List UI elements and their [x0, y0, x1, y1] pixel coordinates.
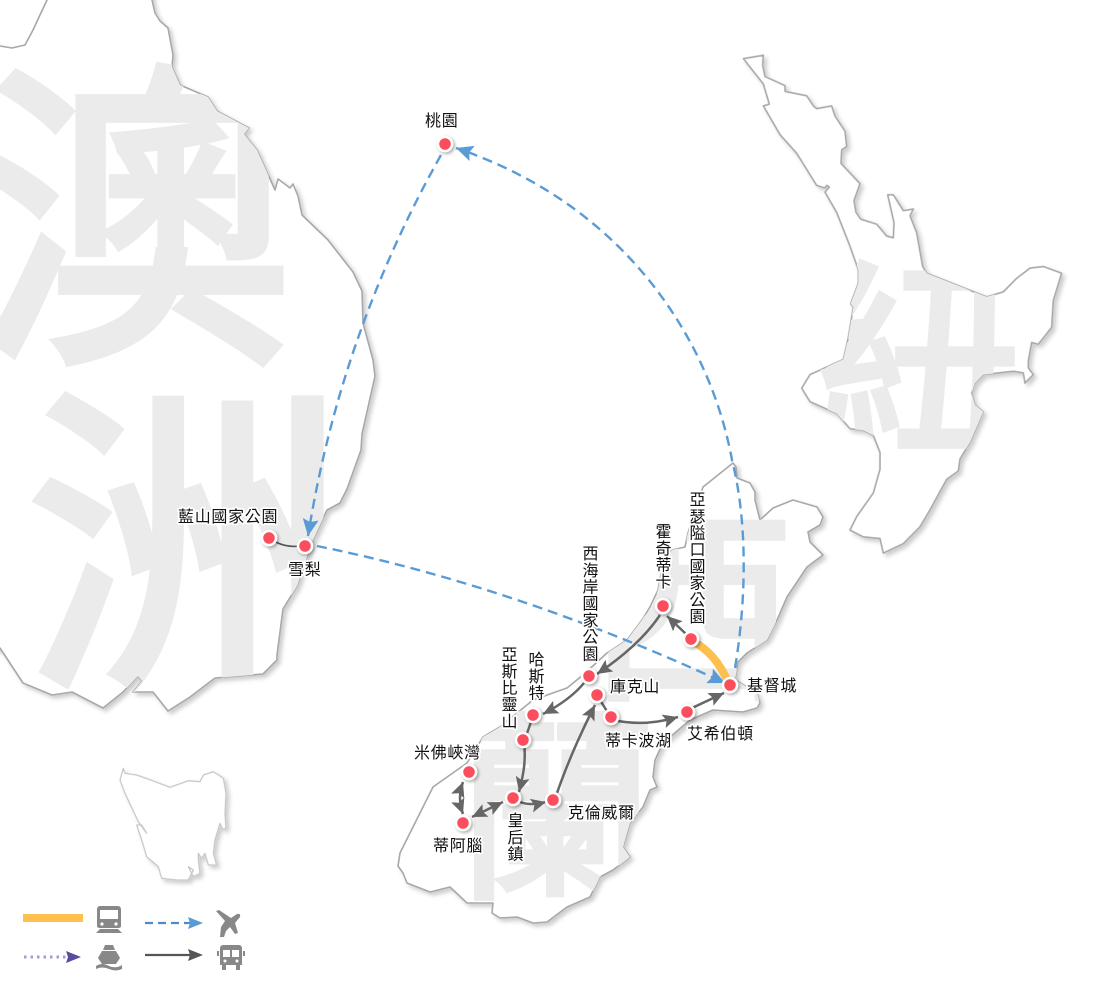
land: New Zealand South Island [398, 463, 823, 923]
bus: 蒂卡波湖 to 艾希伯頓 [613, 717, 678, 723]
marker: 亞斯比靈山 [516, 733, 530, 747]
label: 基督城: 基督城 [747, 677, 797, 695]
marker: 亞瑟隘口 [684, 632, 698, 646]
bus: 西海岸 to 哈斯特 [543, 683, 584, 714]
bus: 霍奇蒂卡 to 西海岸 [597, 615, 660, 674]
background label: 澳洲: 洲 [26, 372, 346, 730]
label: 蒂阿腦: 蒂阿腦 [433, 837, 483, 855]
background label: 西蘭 [474, 520, 786, 901]
background label: 澳洲 [0, 62, 324, 692]
label: 藍山國家公園: 藍山國家公園 [178, 508, 278, 526]
label: 艾希伯頓: 艾希伯頓 [687, 725, 754, 743]
marker: 蒂卡波湖 [604, 710, 618, 724]
location markers [262, 137, 737, 830]
label: 亞斯比靈山: 亞斯比靈山 [498, 646, 518, 730]
icon: ship [96, 945, 122, 970]
flight: 桃園 to 雪梨 [308, 155, 441, 536]
label: 霍奇蒂卡: 霍奇蒂卡 [652, 523, 672, 590]
route: train 亞瑟隘口 to 基督城 [694, 642, 728, 682]
marker: 霍奇蒂卡 [656, 599, 670, 613]
label: 雪梨: 雪梨 [288, 561, 321, 579]
legend: flight line [145, 917, 203, 929]
marker: 桃園 [438, 137, 452, 151]
marker: 艾希伯頓 [680, 705, 694, 719]
background label: 西蘭: 蘭 [456, 702, 656, 925]
label: 皇后鎮: 皇后鎮 [504, 812, 524, 862]
bus: 庫克山 to 蒂卡波湖 [600, 700, 610, 716]
label: 哈斯特: 哈斯特 [526, 651, 544, 701]
land: Tasmania [120, 768, 226, 880]
bus: 克倫威爾 to 庫克山 [557, 705, 595, 793]
marker: 藍山 [262, 531, 276, 545]
place labels [178, 112, 797, 862]
background label: 紐: 紐 [816, 250, 1021, 479]
icon: bus [217, 945, 245, 970]
marker: 米佛峽灣 [462, 765, 476, 779]
legend: train line [23, 914, 83, 922]
label: 庫克山: 庫克山 [610, 678, 660, 696]
bus: 亞瑟隘口 to 霍奇蒂卡 [667, 616, 686, 634]
bus: 皇后鎮 to 克倫威爾 [520, 802, 546, 804]
marker: 哈斯特 [526, 708, 540, 722]
marker: 皇后鎮 [506, 791, 520, 805]
bus: 藍山 to 雪梨 [272, 540, 300, 546]
bus routes [272, 540, 724, 817]
marker: 庫克山 [590, 688, 604, 702]
flight: 雪梨 to 基督城 [317, 546, 725, 683]
land: Australia [0, 0, 375, 711]
flight: 基督城 to 桃園 [456, 148, 744, 668]
label: 桃園: 桃園 [425, 112, 458, 130]
marker: 雪梨 [298, 539, 312, 553]
marker: 西海岸 [582, 669, 596, 683]
bus: 哈斯特 to 皇后鎮 [519, 722, 531, 792]
label: 亞瑟隘口國家公園: 亞瑟隘口國家公園 [686, 491, 706, 625]
marker: 基督城 [723, 678, 737, 692]
legend: ferry line [24, 951, 81, 963]
label: 西海岸國家公園: 西海岸國家公園 [580, 545, 598, 662]
icon: train [96, 906, 122, 933]
bus: 艾希伯頓 to 基督城 [692, 693, 724, 708]
label: 蒂卡波湖: 蒂卡波湖 [605, 732, 672, 750]
label: 克倫威爾: 克倫威爾 [568, 804, 635, 822]
bus: 蒂阿腦 to 皇后鎮 [472, 802, 503, 817]
legend [23, 906, 245, 970]
flight routes [308, 148, 744, 683]
marker: 蒂阿腦 [456, 816, 470, 830]
background label: 西蘭: 西 [588, 496, 795, 727]
label: 米佛峽灣: 米佛峽灣 [414, 744, 481, 762]
bus: 米佛峽灣 to 蒂阿腦 [460, 782, 463, 814]
icon: plane [216, 910, 240, 937]
marker: 克倫威爾 [546, 793, 560, 807]
land: New Zealand North Island [743, 55, 1062, 553]
legend: bus line [145, 949, 203, 961]
